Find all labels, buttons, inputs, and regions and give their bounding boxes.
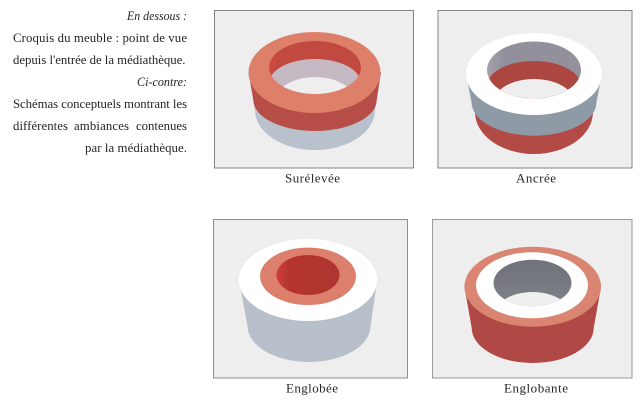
caption line: différentes ambiances contenues [13, 119, 187, 133]
diagram: white ring on grey and red body [466, 33, 602, 154]
label: Englobante: Englobante [504, 380, 568, 396]
caption line: Schémas conceptuels: Schémas conceptuels montrant les [13, 97, 187, 111]
caption line: différentes ambiances contenues: différentes [13, 119, 68, 133]
diagram: raised red ring over grey base [248, 32, 381, 150]
grey lower body [248, 72, 381, 150]
red body [464, 287, 601, 363]
salmon inner ring [260, 248, 356, 305]
caption line: Croquis du meuble: Croquis du meuble : point de vue [13, 31, 187, 45]
panel: Englobante [432, 220, 632, 378]
white top face [466, 33, 602, 115]
salmon top face [464, 247, 601, 327]
salmon top face [248, 32, 380, 113]
caption line: par la médiathèque: par la médiathèque. [85, 141, 187, 155]
hole interior [269, 41, 361, 94]
label: Surélevée: Surélevée [285, 170, 340, 186]
hole interior [487, 42, 581, 98]
panel: Ancrée [438, 10, 632, 168]
diagram: red ring enclosing white ring [464, 247, 601, 363]
dark red core [276, 255, 340, 295]
text block: captions [13, 9, 187, 155]
panel: Englobée [214, 220, 408, 378]
caption heading: Ci-contre: Ci-contre: [137, 75, 187, 89]
label: Englobée: Englobée [286, 380, 338, 396]
caption heading: En dessous: En dessous : [126, 9, 187, 23]
grey body [239, 280, 377, 362]
white top face [239, 239, 377, 321]
red lower body [466, 74, 602, 154]
caption line: différentes ambiances contenues: contenues [136, 119, 187, 133]
grey upper body [466, 74, 602, 136]
hole interior [494, 260, 572, 306]
red upper body [248, 72, 381, 131]
panel: Surélevée [214, 10, 414, 168]
caption line: depuis l'entrée: depuis l'entrée de la médiathèque. [13, 53, 186, 67]
label: Ancrée: Ancrée [516, 170, 556, 186]
caption line: différentes ambiances contenues: ambiances [74, 119, 129, 133]
diagram: white ring enclosing red core [239, 239, 377, 362]
white inner ring [476, 252, 588, 318]
